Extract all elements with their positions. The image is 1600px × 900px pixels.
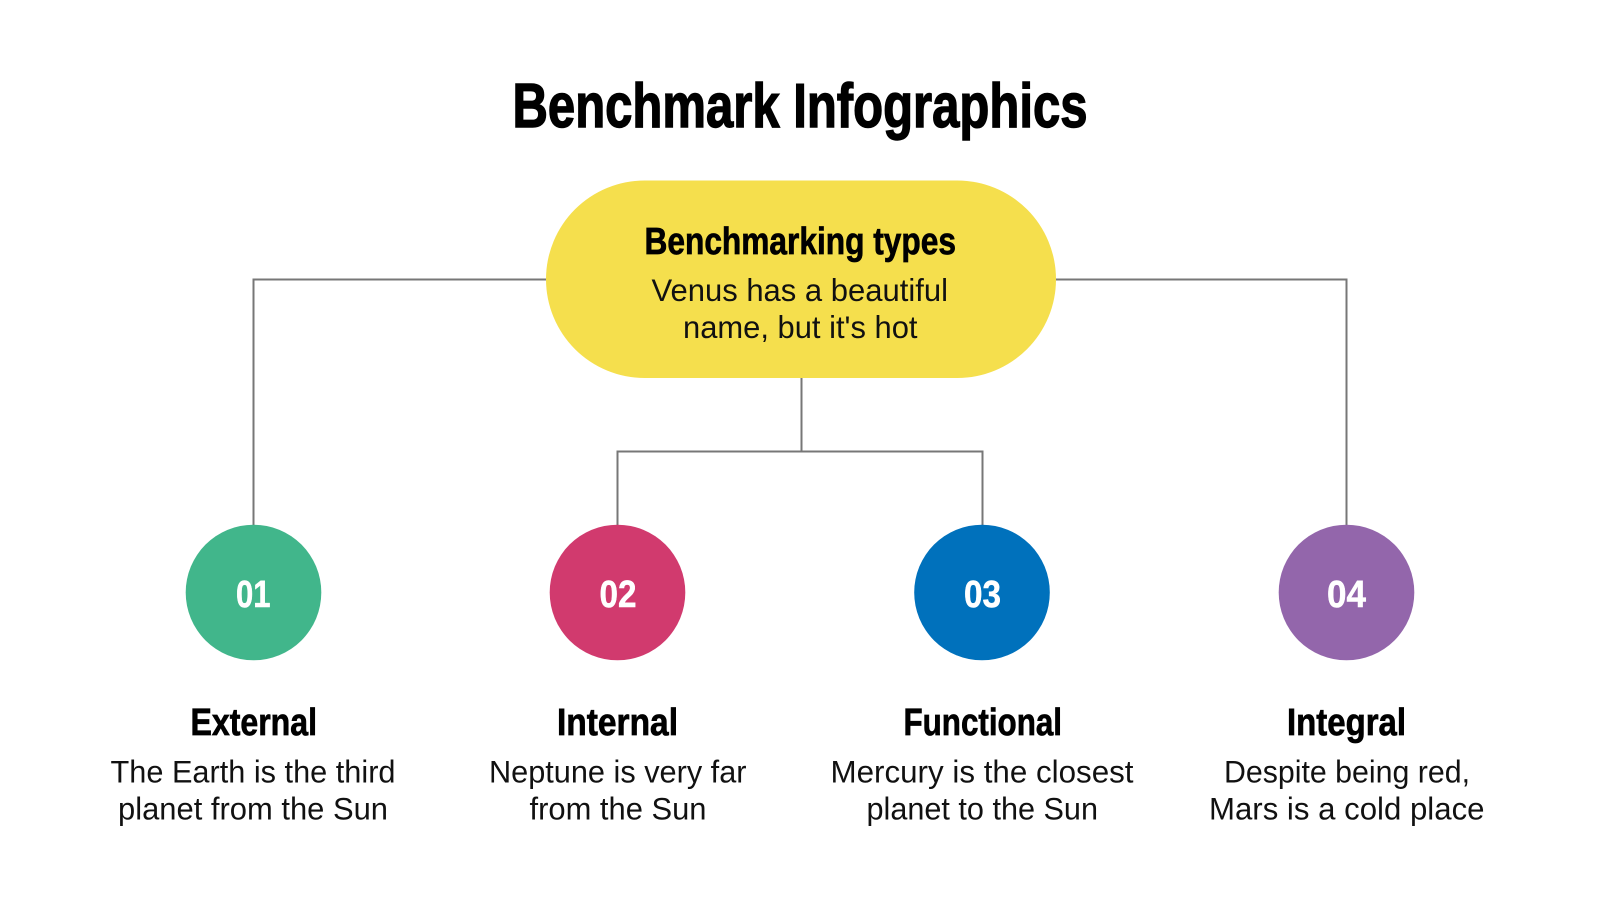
integral description: Mars is a cold place — [1209, 790, 1484, 826]
pill heading: Benchmarking types — [644, 221, 956, 263]
functional description: Mercury is the closest — [830, 754, 1134, 790]
panel: internal — [489, 525, 746, 826]
external description: The Earth is the third — [110, 754, 396, 790]
functional description: planet to the Sun — [866, 790, 1098, 826]
internal description: from the Sun — [530, 790, 706, 826]
pill description: Venus has a beautiful — [652, 272, 948, 308]
blue circle 03 — [914, 525, 1050, 660]
internal heading: Internal — [557, 702, 678, 744]
green circle 01 — [186, 525, 321, 660]
functional heading: Functional — [904, 702, 1062, 744]
internal description — [489, 754, 746, 826]
functional description — [830, 754, 1134, 826]
green circle 01: 01 — [236, 574, 270, 616]
pink circle 02 — [550, 525, 685, 660]
purple circle 04: 04 — [1327, 574, 1366, 616]
connector lines — [254, 280, 1346, 525]
integral description — [1209, 754, 1484, 826]
panel: functional — [830, 525, 1134, 826]
purple circle 04 — [1279, 525, 1414, 660]
external description — [110, 754, 396, 826]
integral heading: Integral — [1287, 702, 1406, 744]
integral description: Despite being red, — [1224, 754, 1470, 790]
internal description: Neptune is very far — [489, 754, 746, 790]
external description: planet from the Sun — [118, 790, 388, 826]
pill description — [652, 272, 948, 345]
panel: benchmarking types — [546, 180, 1056, 378]
title: Benchmark Infographics — [512, 72, 1088, 141]
panel: external — [110, 525, 396, 826]
external heading: External — [190, 702, 317, 744]
panel: integral — [1209, 525, 1484, 826]
blue circle 03: 03 — [964, 574, 1001, 616]
yellow pill — [546, 180, 1056, 378]
pill description: name, but it's hot — [683, 309, 918, 345]
pink circle 02: 02 — [600, 574, 636, 616]
